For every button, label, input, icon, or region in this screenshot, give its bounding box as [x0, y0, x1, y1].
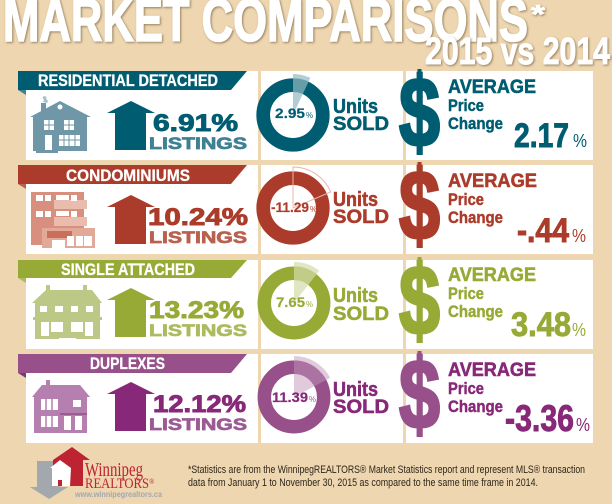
average price change — [448, 359, 590, 439]
donut chart: -11.29 — [271, 199, 309, 215]
banner — [18, 165, 247, 189]
donut chart: % — [309, 394, 316, 404]
donut chart — [264, 356, 330, 427]
units sold label — [333, 285, 389, 325]
units sold label — [333, 189, 389, 228]
units card — [261, 354, 403, 443]
donut chart: % — [306, 110, 313, 120]
banner: DUPLEXES — [90, 354, 165, 373]
listings figure: 13.23% — [149, 297, 244, 324]
units sold label: SOLD — [333, 206, 389, 228]
average price change: % — [576, 415, 590, 435]
logo wordmark: Winnipeg — [85, 459, 143, 481]
average price change: Change — [448, 397, 503, 416]
listings label: LISTINGS — [149, 322, 247, 340]
average price change — [448, 170, 586, 250]
listings figure: 12.12% — [153, 391, 246, 418]
average price change: -.44 — [517, 212, 569, 250]
icon: grey down arrow — [30, 461, 68, 499]
donut chart: % — [310, 204, 317, 214]
icon: dollar sign: $ — [399, 57, 440, 167]
donut chart — [263, 167, 331, 238]
icon: attached house — [32, 285, 102, 339]
listings label: LISTINGS — [149, 135, 247, 153]
average price change: Price — [448, 96, 484, 115]
listings card — [26, 165, 258, 254]
panel: residential detached — [18, 57, 593, 167]
average price change: Change — [448, 302, 503, 321]
units sold label — [333, 96, 389, 135]
units card — [261, 71, 403, 160]
banner — [18, 260, 247, 283]
average price change: AVERAGE — [448, 264, 536, 286]
icon: dollar sign: $ — [399, 245, 440, 355]
average price change: 3.48 — [511, 306, 571, 344]
listings figure: 10.24% — [148, 204, 248, 231]
icon: condo building — [31, 192, 95, 248]
donut chart: 7.65 — [276, 294, 305, 310]
listings figure: 6.91% — [153, 110, 238, 137]
banner: SINGLE ATTACHED — [61, 260, 195, 279]
listings label: LISTINGS — [149, 416, 247, 434]
average price change: AVERAGE — [448, 170, 537, 192]
website: www.winnipegrealtors.ca — [74, 490, 162, 499]
average price change: AVERAGE — [448, 76, 536, 98]
units sold label: Units — [333, 285, 378, 307]
units sold label: Units — [333, 96, 378, 118]
donut chart — [263, 74, 323, 145]
icon: up arrow — [107, 288, 155, 337]
units sold label — [333, 379, 389, 418]
icon: dollar sign: $ — [399, 339, 440, 449]
icon: up arrow — [107, 382, 155, 431]
units sold label: SOLD — [333, 303, 389, 325]
banner: CONDOMINIUMS — [66, 166, 190, 185]
donut chart: % — [306, 299, 313, 309]
listings label: LISTINGS — [149, 229, 247, 247]
average price change: Price — [448, 379, 484, 398]
listings card — [26, 71, 258, 160]
price card — [406, 71, 593, 160]
logo wordmark: REALTORS — [85, 476, 149, 492]
icon: red up arrow — [53, 447, 90, 486]
donut chart: 2.95 — [275, 105, 305, 121]
icon: up arrow — [107, 101, 155, 150]
units sold label: SOLD — [333, 396, 389, 418]
listings card — [26, 260, 258, 349]
icon: dollar sign: $ — [399, 150, 440, 260]
average price change: % — [572, 320, 586, 340]
units sold label: Units — [333, 189, 378, 211]
units sold label: Units — [333, 379, 378, 401]
average price change: % — [573, 131, 587, 151]
average price change: 2.17 — [514, 117, 569, 155]
average price change: Change — [448, 208, 503, 227]
units card — [261, 165, 403, 254]
average price change — [448, 76, 587, 155]
icon: detached house — [30, 96, 91, 153]
average price change: -3.36 — [505, 398, 574, 439]
logo: Winnipeg Realtors — [30, 447, 162, 499]
price card — [406, 354, 593, 443]
footnote: data from January 1 to November 30, 2015 as compared to the same time frame in 2014. — [188, 477, 538, 489]
panel: condominiums — [18, 150, 593, 260]
logo wordmark — [85, 459, 155, 492]
panel: duplexes — [18, 339, 593, 449]
icon: duplex house — [32, 380, 90, 433]
average price change: Price — [448, 190, 484, 209]
average price change: Change — [448, 114, 503, 133]
donut chart: 11.39 — [272, 389, 308, 405]
donut chart — [264, 262, 324, 333]
average price change — [448, 264, 586, 344]
price card — [406, 260, 593, 349]
logo wordmark: ® — [149, 478, 155, 486]
price card — [406, 165, 593, 254]
listings card — [26, 354, 258, 443]
average price change: Price — [448, 284, 484, 303]
banner — [18, 354, 247, 378]
average price change: % — [572, 226, 586, 246]
icon: up arrow — [107, 195, 155, 244]
footnote — [188, 464, 585, 489]
units sold label: SOLD — [333, 113, 389, 135]
average price change: AVERAGE — [448, 359, 536, 381]
banner: RESIDENTIAL DETACHED — [38, 71, 218, 90]
icon: white house — [50, 460, 71, 486]
units card — [261, 260, 403, 349]
panel: single attached — [18, 245, 593, 355]
